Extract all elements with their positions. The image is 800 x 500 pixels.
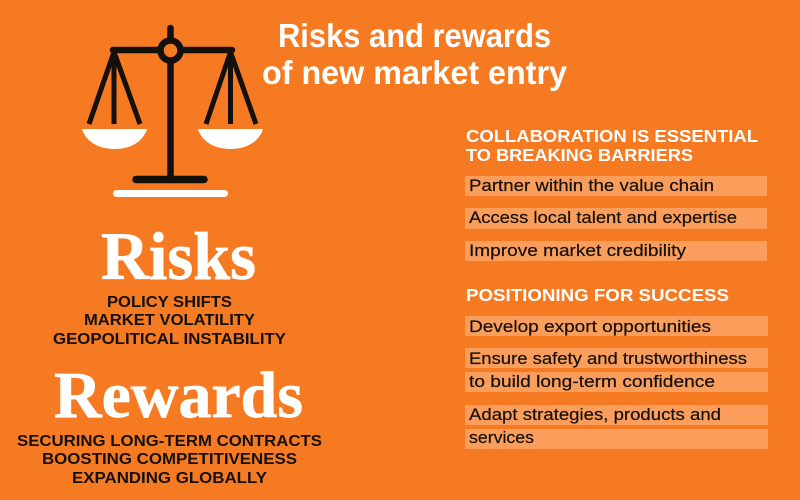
item: export: [465, 316, 768, 336]
title: of new market entry: [262, 54, 568, 91]
item: safety: Ensure safety and trustworthiness: [469, 349, 747, 368]
item: credibility: Improve market credibility: [469, 241, 687, 260]
risks list: POLICY SHIFTS: [107, 294, 232, 311]
title: Risks and rewards: [278, 17, 551, 54]
rewards list: BOOSTING COMPETITIVENESS: [42, 451, 297, 468]
item: adapt: [465, 405, 768, 449]
item: access: Access local talent and expertise: [469, 208, 737, 227]
panel: collaboration: [465, 126, 767, 261]
panel: positioning: [465, 285, 768, 449]
item: adapt: Adapt strategies, products and: [469, 405, 721, 424]
heading: Rewards: Rewards: [54, 359, 303, 432]
heading: collaboration: [466, 126, 758, 165]
risks list: MARKET VOLATILITY: [84, 312, 256, 329]
risks list: GEOPOLITICAL INSTABILITY: [53, 331, 287, 348]
item: adapt: services: [469, 428, 534, 447]
icon: balance scale: [82, 28, 263, 197]
rewards list: SECURING LONG-TERM CONTRACTS: [17, 433, 322, 450]
heading: collaboration: TO BREAKING BARRIERS: [466, 145, 693, 165]
risks list: [53, 294, 287, 348]
heading: Risks: Risks: [101, 218, 256, 294]
rewards list: EXPANDING GLOBALLY: [72, 470, 268, 487]
title: [262, 17, 568, 91]
item: safety: to build long-term confidence: [469, 372, 715, 391]
item: export: Develop export opportunities: [469, 317, 711, 336]
heading: collaboration: COLLABORATION IS ESSENTIAL: [466, 126, 758, 146]
item: credibility: [465, 241, 767, 261]
heading: positioning: POSITIONING FOR SUCCESS: [466, 285, 729, 305]
item: safety: [465, 348, 768, 392]
rewards list: [17, 433, 322, 487]
item: partner: Partner within the value chain: [469, 176, 714, 195]
